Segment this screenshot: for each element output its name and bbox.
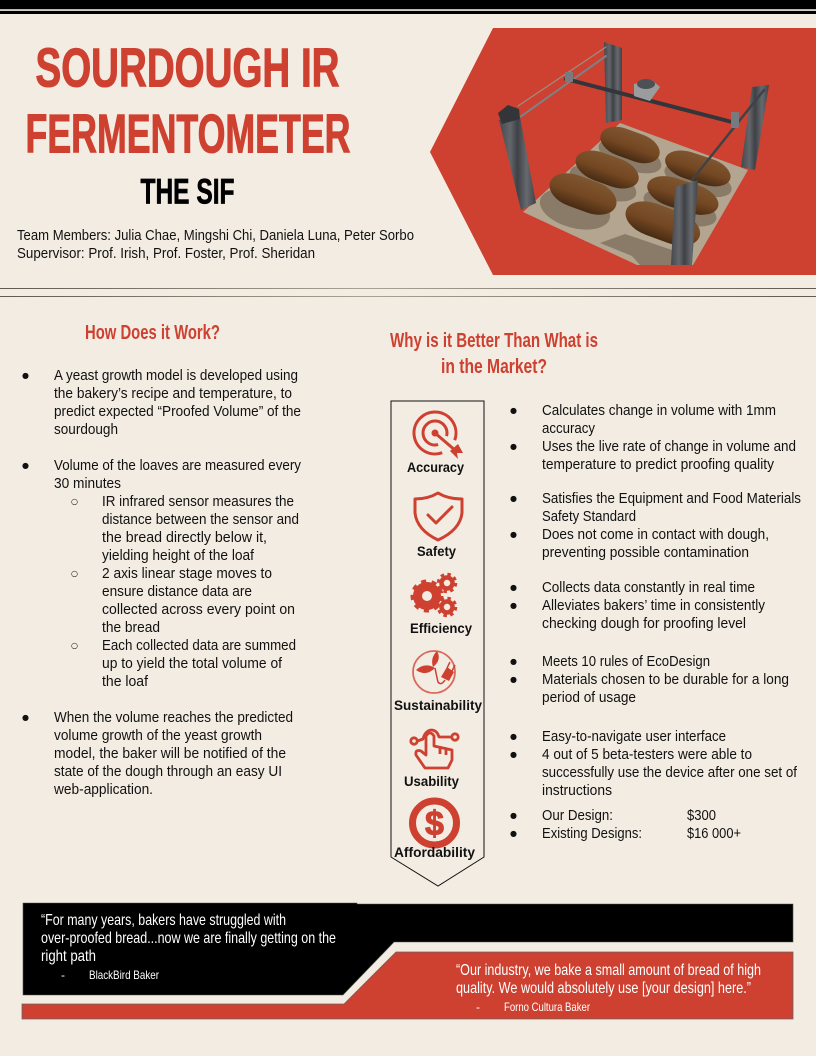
panel: benefits list: temperature to predict proofing quality (542, 457, 775, 473)
panel: benefits list: $16 000+ (687, 826, 741, 842)
front post (671, 180, 698, 265)
panel: benefits list: ● (510, 494, 517, 503)
team credits: Team Members: Julia Chae, Mingshi Chi, Daniela Luna, Peter Sorbo (17, 228, 414, 244)
panel: how it works list: web-application. (53, 782, 153, 798)
left post (499, 117, 536, 210)
panel: how it works list: 30 minutes (54, 476, 121, 492)
panel: benefits list: Collects data constantly in real time (542, 580, 755, 596)
panel: benefits list: accuracy (542, 421, 596, 437)
quote: blackbird baker (41, 912, 336, 982)
panel: benefits list: Materials chosen to be durable for a long (542, 672, 789, 688)
panel: how it works list: IR infrared sensor measures the (102, 494, 294, 510)
panel: how it works list: the bakery’s recipe and temperature, to (54, 386, 292, 402)
panel: how it works list: 2 axis linear stage moves to (102, 566, 272, 582)
panel: how it works list: the bread directly below it, (102, 530, 267, 546)
quote: blackbird baker: over-proofed bread...now we are finally getting on the (41, 930, 336, 947)
back post (604, 42, 622, 123)
panel: benefits list: ● (510, 530, 517, 539)
panel: benefits list: ● (510, 601, 517, 610)
sensor carriage (634, 79, 660, 101)
panel: how it works list: ● (22, 713, 29, 722)
panel: benefits list: preventing possible contamination (542, 545, 749, 561)
panel: benefits list: Our Design: (542, 808, 613, 824)
panel: how it works list: ● (22, 461, 29, 470)
label: usability: Usability (404, 773, 459, 789)
panel: benefits list: ● (510, 442, 517, 451)
quote: blackbird baker: - (61, 968, 65, 982)
banner outline (391, 401, 484, 886)
panel: benefits list: ● (510, 583, 517, 592)
panel: how it works list: the bread (102, 620, 160, 636)
title: FERMENTOMETER (26, 103, 350, 165)
subtitle: THE SIF (140, 173, 234, 212)
panel: benefits list: Existing Designs: (542, 826, 642, 842)
icon: sustainability leaf and plug (413, 651, 455, 693)
quote: blackbird baker: right path (41, 948, 96, 965)
right post (741, 85, 769, 170)
panel: how it works list: the loaf (102, 674, 149, 690)
loaves (545, 121, 734, 252)
loaf shadows (535, 132, 736, 265)
red hexagon background (430, 28, 816, 275)
label: sustainability: Sustainability (394, 697, 482, 713)
panel: benefits list: 4 out of 5 beta-testers were able to (542, 747, 752, 763)
heading: why better: in the Market? (441, 356, 547, 378)
panel: how it works list: volume growth of the yeast growth (54, 728, 262, 744)
label: safety: Safety (417, 543, 456, 559)
panel: benefits list: successfully use the device after one set of (542, 765, 798, 781)
quote: blackbird baker: BlackBird Baker (89, 968, 159, 982)
panel: how it works list: Each collected data are summed (102, 638, 296, 654)
title: SOURDOUGH IR (36, 37, 340, 99)
quote: forno cultura baker: Forno Cultura Baker (504, 1000, 590, 1014)
icon: accuracy target (414, 412, 463, 459)
rod brackets (565, 72, 573, 82)
quote panel: red (22, 952, 793, 1019)
heading: why better: Why is it Better Than What is (390, 330, 598, 352)
panel: how it works list: ○ (71, 569, 78, 578)
panel: how it works list: state of the dough through an easy UI (54, 764, 282, 780)
top black band (0, 0, 816, 14)
quote: forno cultura baker: - (476, 1000, 480, 1014)
panel: how it works list: ● (22, 371, 29, 380)
panel: benefits list: checking dough for proofing level (542, 616, 746, 632)
quote: forno cultura baker (456, 962, 761, 1014)
quote panel: black (23, 903, 793, 995)
panel: benefits list: instructions (542, 783, 612, 799)
panel: how it works list: yielding height of the loaf (102, 548, 255, 564)
icon: safety shield (415, 493, 462, 540)
panel: how it works list: sourdough (54, 422, 118, 438)
panel: benefits list: ● (510, 732, 517, 741)
panel: benefits list: $300 (687, 808, 716, 824)
panel: benefits list: ● (510, 811, 517, 820)
panel: how it works list: collected across every point on (102, 602, 295, 618)
label: efficiency: Efficiency (410, 620, 472, 636)
panel: benefits list (510, 403, 801, 842)
title (26, 37, 350, 165)
panel: benefits list: Satisfies the Equipment and Food Materials (542, 491, 801, 507)
double divider (0, 288, 816, 289)
panel: how it works list (22, 368, 302, 798)
label: accuracy: Accuracy (407, 459, 464, 475)
panel: benefits list: Calculates change in volume with 1mm (542, 403, 776, 419)
panel: benefits list: ● (510, 750, 517, 759)
panel: benefits list: Easy-to-navigate user interface (542, 729, 726, 745)
panel: how it works list: model, the baker will be notified of the (54, 746, 286, 762)
icon: usability hand (411, 730, 458, 768)
hero panel: device rendering (430, 28, 816, 275)
panel: benefits list: Meets 10 rules of EcoDesign (542, 654, 710, 670)
label: affordability: Affordability (394, 844, 475, 860)
panel: how it works list: A yeast growth model is developed using (54, 368, 298, 384)
panel: benefits list: ● (510, 675, 517, 684)
gantry rods (518, 47, 764, 180)
panel: benefits list: Does not come in contact with dough, (542, 527, 769, 543)
heading: why better (390, 330, 598, 378)
quote: blackbird baker: “For many years, bakers have struggled with (41, 912, 286, 929)
icon: affordability dollar: $ (425, 805, 444, 843)
panel: how it works list: ○ (71, 497, 78, 506)
panel: benefits list: Safety Standard (542, 509, 636, 525)
panel: how it works list: up to yield the total volume of (102, 656, 283, 672)
panel: how it works list: ○ (71, 641, 78, 650)
heading: how does it work: How Does it Work? (85, 322, 220, 344)
panel: how it works list: Volume of the loaves are measured every (54, 458, 302, 474)
icon: efficiency gears (412, 574, 456, 616)
panel: benefits list: ● (510, 406, 517, 415)
panel: how it works list: predict expected “Proofed Volume” of the (54, 404, 301, 420)
panel: benefits list: period of usage (542, 690, 636, 706)
panel: benefits list: ● (510, 829, 517, 838)
panel: how it works list: distance between the sensor and (102, 512, 299, 528)
panel: benefits list: Alleviates bakers’ time in consistently (542, 598, 766, 614)
team credits (17, 228, 414, 262)
team credits: Supervisor: Prof. Irish, Prof. Foster, Prof. Sheridan (17, 246, 315, 262)
panel: how it works list: When the volume reaches the predicted (54, 710, 293, 726)
base board (523, 123, 748, 265)
panel: benefits list: ● (510, 657, 517, 666)
panel: benefits list: Uses the live rate of change in volume and (542, 439, 796, 455)
panel: how it works list: ensure distance data are (102, 584, 252, 600)
icon: affordability dollar (412, 801, 456, 845)
